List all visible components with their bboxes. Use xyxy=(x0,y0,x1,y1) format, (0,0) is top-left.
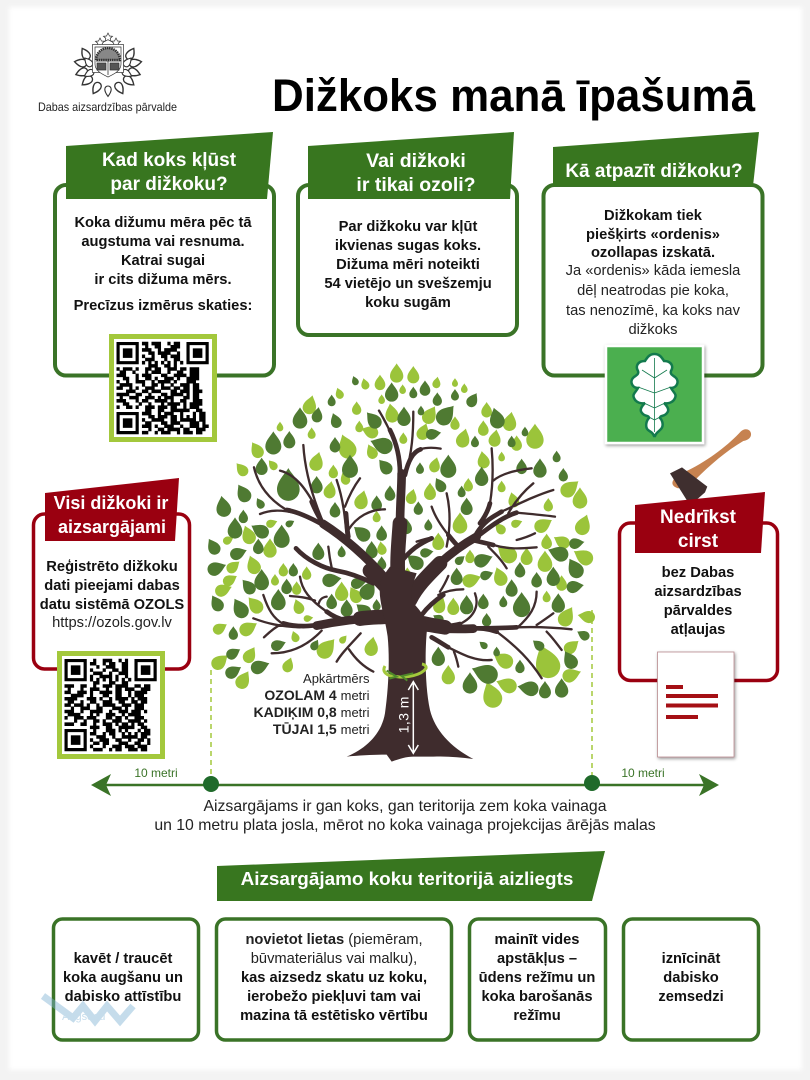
prohibition box 2: novietot lietas (piemēram, xyxy=(245,932,423,948)
protected zone arrow: 10 metri xyxy=(621,766,665,780)
panel: only oaks?: koku sugām xyxy=(365,295,451,311)
panel: must not cut: cirst xyxy=(678,531,719,552)
panel: must not cut: aizsardzības xyxy=(654,584,742,600)
panel: when a tree becomes a great tree: Koka dižumu mēra pēc tā xyxy=(74,215,252,231)
heading banner: prohibited: Aizsargājamo koku teritorijā aizliegts xyxy=(241,869,573,890)
prohibition box 2 xyxy=(216,919,452,1040)
prohibition box 4: iznīcināt xyxy=(662,951,720,967)
panel: only oaks?: Par dižkoku var kļūt xyxy=(339,219,477,235)
girth text: OZOLAM 4 metri xyxy=(264,687,370,703)
prohibition box 3: apstākļus – xyxy=(497,951,577,967)
height label: 1,3 m xyxy=(395,697,411,733)
panel: all great trees protected: Reģistrēto dižkoku xyxy=(46,559,178,575)
branches and trunk xyxy=(253,411,572,762)
panel: must not cut: pārvaldes xyxy=(664,603,732,619)
prohibition box 3 xyxy=(470,919,606,1040)
icon: axe xyxy=(670,429,751,501)
panel: how to recognise: dēļ neatrodas pie koka, xyxy=(577,283,729,299)
title: Dižkoks manā īpašumā xyxy=(272,70,756,121)
illustration: tree xyxy=(204,363,596,762)
panel: all great trees protected: aizsargājami xyxy=(58,517,166,537)
panel: when a tree becomes a great tree: Precīzus izmērus skaties: xyxy=(74,298,252,314)
panel: only oaks?: ikvienas sugas koks. xyxy=(335,238,481,254)
panel: only oaks?: ir tikai ozoli? xyxy=(356,174,476,196)
panel: when a tree becomes a great tree: Katrai sugai xyxy=(121,253,205,269)
panel: only oaks?: Dižuma mēri noteikti xyxy=(336,257,480,273)
organisation name: Dabas aizsardzības pārvalde xyxy=(38,100,177,114)
girth text: TŪJAI 1,5 metri xyxy=(273,721,370,737)
prohibition box 2: mazina tā estētisko vērtību xyxy=(240,1008,428,1024)
protected zone arrow: 10 metri xyxy=(134,766,178,780)
panel: how to recognise: Dižkokam tiek xyxy=(604,208,703,224)
girth text: KADIĶIM 0,8 metri xyxy=(253,704,370,720)
watermark: Augsdau xyxy=(62,1011,105,1023)
dark leaves xyxy=(204,375,591,698)
protected zone arrow xyxy=(91,766,719,796)
panel: how to recognise: ozollapas izskatā. xyxy=(591,245,715,261)
panel: how to recognise: tas nenozīmē, ka koks nav xyxy=(566,303,741,319)
logo: coat of arms xyxy=(74,33,142,96)
heading banner: prohibited xyxy=(217,851,605,901)
prohibition box 3: ūdens režīmu un xyxy=(479,970,595,986)
prohibition box 2: būvmateriālus vai malku), xyxy=(251,951,417,967)
panel: how to recognise: Kā atpazīt dižkoku? xyxy=(565,161,743,182)
panel: how to recognise: Ja «ordenis» kāda iemesla xyxy=(566,263,741,279)
girth text: Apkārtmērs xyxy=(303,671,370,686)
panel: all great trees protected: https://ozols.gov.lv xyxy=(52,615,173,631)
prohibition box 2: kas aizsedz skatu uz koku, xyxy=(241,970,427,986)
panel: all great trees protected: Visi dižkoki ir xyxy=(54,493,168,513)
caption: un 10 metru plata josla, mērot no koka vainaga projekcijas ārējās malas xyxy=(154,817,656,834)
panel: how to recognise: dižkoks xyxy=(629,322,677,338)
panel: how to recognise: piešķirts «ordenis» xyxy=(586,227,720,243)
prohibition box 1: dabisko attīstību xyxy=(65,989,181,1005)
panel: only oaks?: Vai dižkoki xyxy=(366,150,466,172)
panel: must not cut: Nedrīkst xyxy=(660,507,737,528)
panel: how to recognise xyxy=(544,132,762,443)
panel: when a tree becomes a great tree: ir cits dižuma mērs. xyxy=(94,272,232,288)
dashed projection lines xyxy=(211,610,592,775)
prohibition box 3: mainīt vides xyxy=(495,932,579,948)
light leaves xyxy=(209,363,596,710)
panel: must not cut: bez Dabas xyxy=(662,565,734,581)
caption: Aizsargājams ir gan koks, gan teritorija zem koka vainaga xyxy=(203,798,607,815)
prohibition box 4: zemsedzi xyxy=(658,989,724,1005)
icon: oak leaf order xyxy=(606,346,703,443)
icon: document xyxy=(658,652,734,757)
panel: all great trees protected: dati pieejami dabas xyxy=(44,578,180,594)
prohibition box 1 xyxy=(54,919,198,1040)
caption xyxy=(154,798,656,834)
panel: only oaks?: 54 vietējo un svešzemju xyxy=(324,276,492,292)
prohibition box 2: ierobežo piekļuvi tam vai xyxy=(247,989,421,1005)
prohibition box 3: koka barošanās xyxy=(481,989,593,1005)
panel: when a tree becomes a great tree: par dižkoku? xyxy=(110,174,228,195)
QR code 1 xyxy=(112,336,214,440)
height arrow xyxy=(408,682,418,753)
panel: when a tree becomes a great tree xyxy=(55,132,274,440)
panel: when a tree becomes a great tree: Kad koks kļūst xyxy=(102,150,237,171)
girth text xyxy=(253,671,370,737)
watermark xyxy=(43,996,133,1023)
panel: only oaks? xyxy=(298,132,517,335)
panel: all great trees protected: datu sistēmā OZOLS xyxy=(40,597,184,613)
prohibition box 1: kavēt / traucēt xyxy=(74,951,172,967)
prohibition box 3: režīmu xyxy=(513,1008,561,1024)
QR code 2 xyxy=(60,654,162,756)
panel: must not cut xyxy=(620,492,778,757)
prohibition box 4 xyxy=(624,919,758,1040)
prohibition box 1: koka augšanu un xyxy=(63,970,183,986)
panel: when a tree becomes a great tree: augstuma vai resnuma. xyxy=(81,234,245,250)
panel: all great trees protected xyxy=(34,478,190,756)
panel: must not cut: atļaujas xyxy=(671,622,725,638)
prohibition box 4: dabisko xyxy=(663,970,719,986)
girth ring xyxy=(384,664,426,681)
